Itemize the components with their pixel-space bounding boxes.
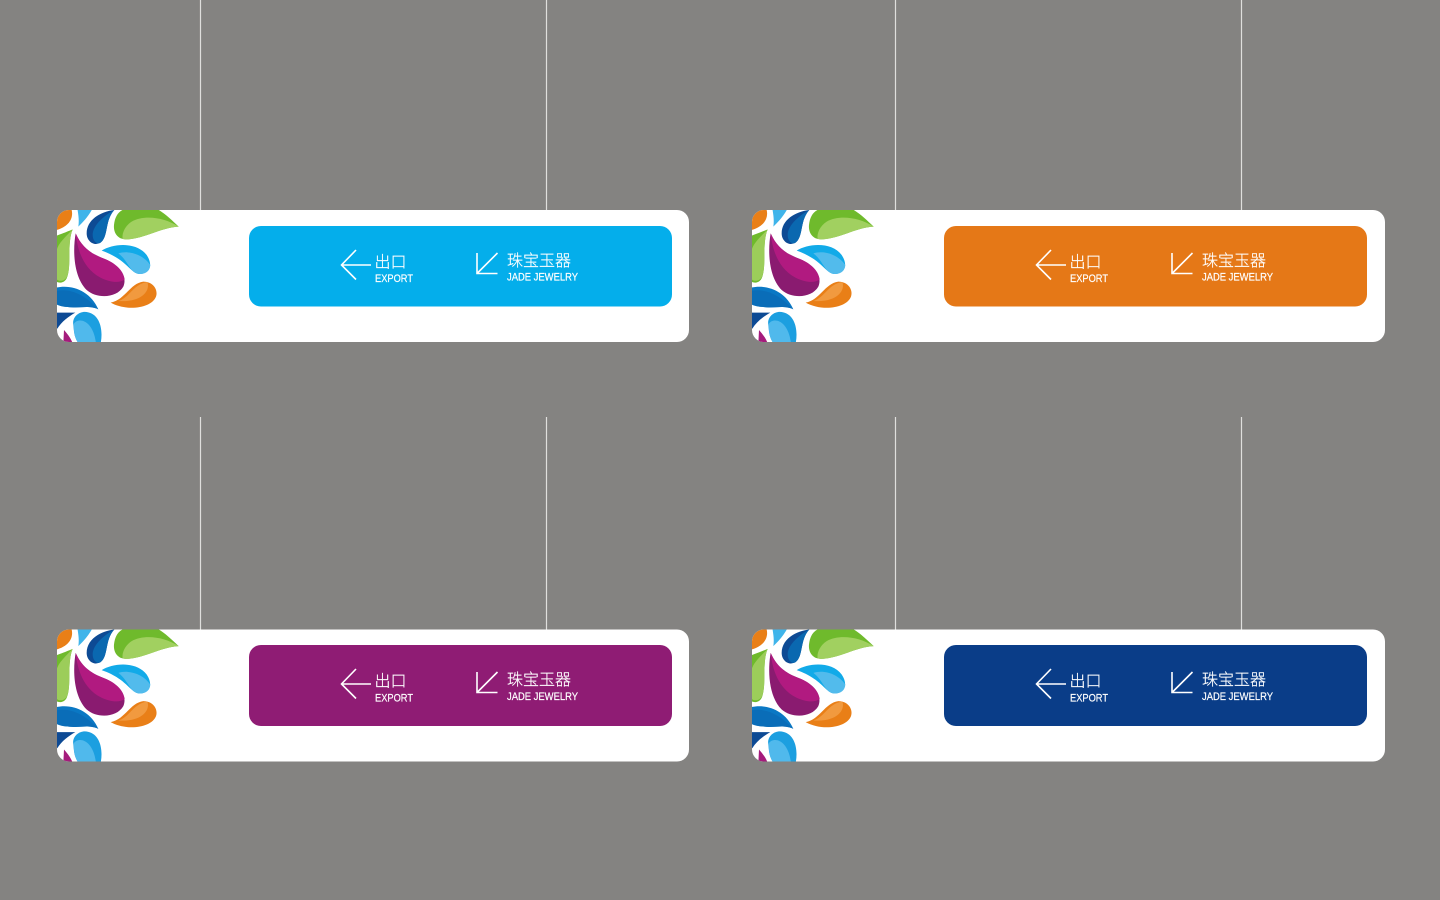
hanging wires — [200, 0, 546, 210]
hanging wires — [896, 0, 1242, 210]
text: jewelry english: JADE JEWELRY — [1202, 272, 1274, 284]
panel: navy hanging sign — [748, 417, 1385, 763]
sign board — [752, 210, 1385, 342]
colour panel — [249, 226, 672, 306]
text: jewelry english: JADE JEWELRY — [1202, 691, 1274, 703]
text: jewelry chinese: 珠宝玉器 — [1202, 671, 1266, 689]
arrow: left — [1036, 669, 1066, 698]
icon: petal logo — [53, 626, 179, 763]
sign board — [752, 630, 1385, 762]
arrow: down left — [1172, 253, 1192, 274]
arrow: left — [342, 250, 371, 280]
arrow: down left — [477, 672, 498, 692]
colour panel — [944, 645, 1367, 726]
arrow: left — [1036, 250, 1066, 280]
hanging wires — [200, 417, 546, 630]
text: jewelry english: JADE JEWELRY — [507, 272, 579, 284]
text: exit chinese: 出口 — [1070, 672, 1102, 690]
arrow: down left — [477, 253, 498, 274]
text: exit english: EXPORT — [1070, 692, 1108, 704]
icon: petal logo — [53, 207, 179, 343]
text: exit chinese: 出口 — [374, 672, 407, 690]
arrow: left — [342, 669, 371, 698]
icon: petal logo — [748, 207, 874, 343]
text: exit english: EXPORT — [1070, 273, 1108, 285]
text: jewelry chinese: 珠宝玉器 — [507, 252, 571, 270]
panel: purple hanging sign — [53, 417, 689, 763]
text: jewelry chinese: 珠宝玉器 — [1202, 252, 1266, 270]
arrow: down left — [1172, 672, 1192, 692]
panel: cyan hanging sign — [53, 0, 689, 343]
text: exit chinese: 出口 — [374, 254, 407, 272]
panel: orange hanging sign — [748, 0, 1385, 343]
text: exit chinese: 出口 — [1070, 254, 1102, 272]
text: jewelry english: JADE JEWELRY — [507, 691, 579, 703]
sign board — [57, 210, 689, 342]
colour panel — [944, 226, 1367, 306]
text: exit english: EXPORT — [375, 273, 413, 285]
text: jewelry chinese: 珠宝玉器 — [507, 671, 571, 689]
icon: petal logo — [748, 626, 874, 763]
hanging wires — [896, 417, 1242, 630]
sign board — [57, 630, 689, 762]
text: exit english: EXPORT — [375, 692, 413, 704]
colour panel — [249, 645, 672, 726]
